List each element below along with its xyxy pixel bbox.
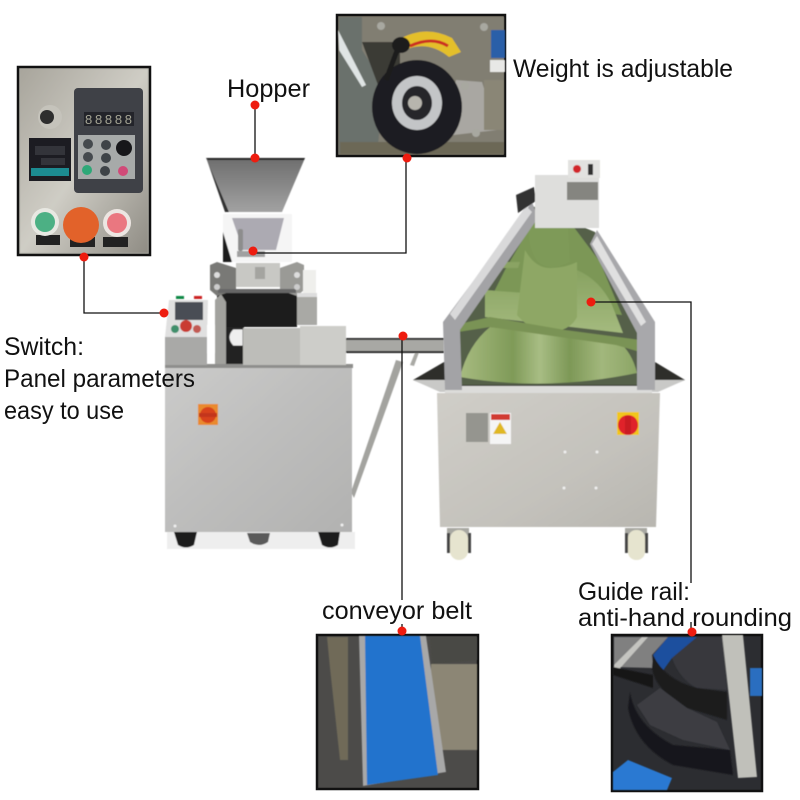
machine: dough divider (left)	[165, 158, 444, 549]
green cross brackets	[455, 317, 640, 352]
meter	[29, 138, 71, 181]
label: Hopper: Hopper	[227, 75, 310, 103]
red dots	[80, 100, 696, 636]
hopper	[206, 158, 305, 262]
conveyor rail	[346, 338, 444, 353]
upper lip	[652, 655, 727, 720]
buttons	[31, 207, 131, 247]
callout lines	[84, 105, 691, 632]
lower lip	[628, 692, 733, 775]
forming head	[210, 262, 317, 325]
knob	[38, 105, 62, 129]
label: Switch panel parameters: easy to use	[4, 397, 124, 425]
arm	[613, 667, 653, 688]
casters	[447, 528, 648, 560]
green trough	[517, 250, 577, 332]
label: Guide rail anti-hand rounding: anti-hand rounding	[578, 604, 792, 632]
blue belt	[613, 760, 672, 790]
tray	[413, 362, 685, 392]
floor shadow	[167, 532, 355, 549]
steel frame	[443, 202, 655, 390]
control box	[165, 296, 215, 365]
grey upper-left background	[614, 637, 668, 668]
cabinet	[165, 367, 352, 532]
dark interior	[460, 205, 637, 385]
photo: guide rail	[612, 635, 762, 791]
photo: conveyor belt	[317, 635, 478, 789]
machine: dough rounder (right)	[413, 160, 685, 560]
photo: weight handwheel	[337, 15, 505, 156]
front guards	[229, 326, 346, 365]
rating plates	[466, 413, 511, 444]
red isolator	[617, 412, 639, 435]
caster wheels	[174, 532, 340, 548]
blue behind cone	[653, 637, 697, 672]
middle green band	[485, 270, 623, 333]
second tier	[637, 688, 730, 750]
inverter	[74, 88, 143, 193]
lower green bowl	[460, 327, 637, 384]
upper cone	[672, 637, 727, 690]
label: Weight is adjustable: Weight is adjustable	[513, 55, 733, 83]
photo: control panel	[18, 67, 150, 255]
control housing	[516, 160, 600, 228]
label: conveyor belt: conveyor belt	[322, 597, 472, 625]
base cabinet	[437, 393, 660, 527]
inverter: 88888	[85, 112, 132, 127]
isolator switch	[198, 404, 218, 425]
label: Switch panel parameters: Switch:	[4, 333, 84, 361]
upper green cone	[490, 222, 622, 315]
steel rail	[722, 635, 757, 778]
support leg	[351, 360, 403, 498]
dark mechanism	[217, 290, 297, 327]
label: Guide rail anti-hand rounding: Guide rail:	[578, 578, 690, 606]
label: Switch panel parameters: Panel parameters	[4, 365, 195, 393]
